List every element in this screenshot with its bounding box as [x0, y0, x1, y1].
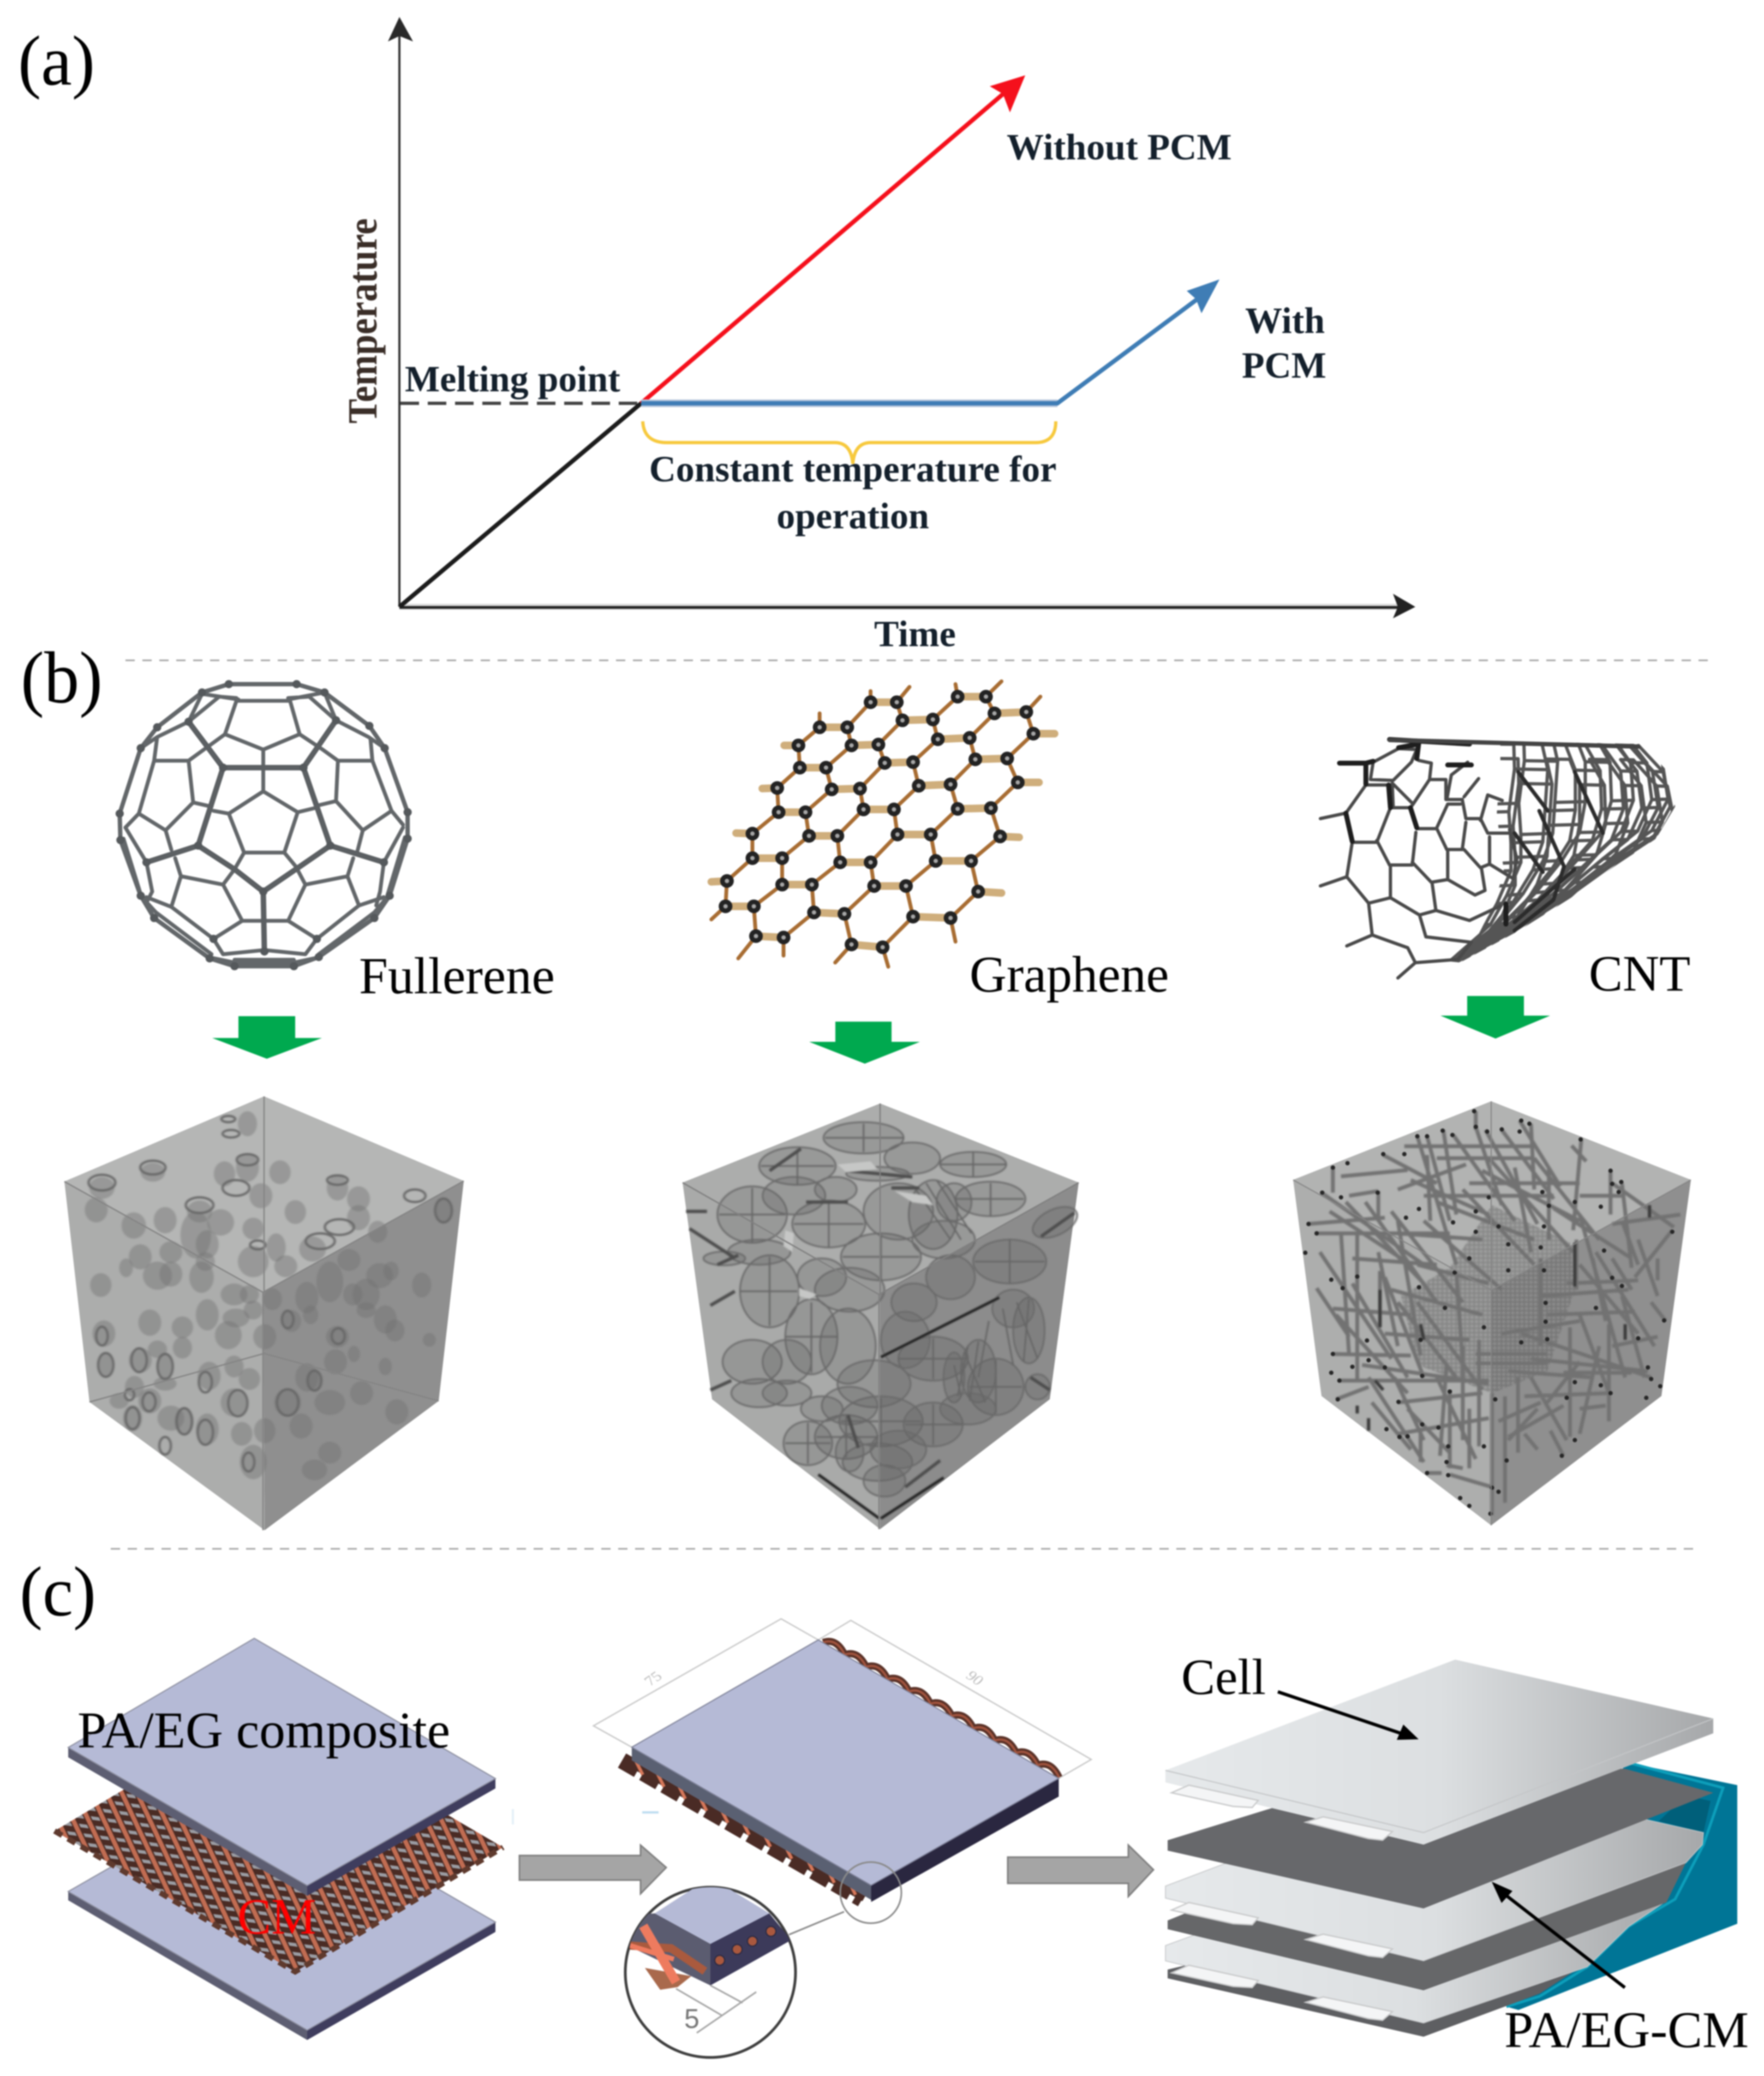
dimension values: 75 [641, 1668, 666, 1689]
dashed melting point line [400, 402, 639, 405]
x axis title: Time [874, 613, 956, 654]
red arrow without PCM [641, 75, 1025, 403]
panel label (c): (c) [20, 1553, 96, 1631]
constant temperature label: Constant temperature for [649, 448, 1056, 490]
stray blue mark [642, 1811, 659, 1813]
with PCM label: PCM [1242, 344, 1326, 386]
fullerene label: Fullerene [359, 947, 555, 1005]
plate top face [632, 1640, 1059, 1886]
constant temperature label: operation [776, 495, 929, 536]
constant temperature label [649, 448, 1056, 536]
copper mesh edge left [622, 1758, 865, 1899]
copper mesh edge right [823, 1642, 1059, 1777]
panel c: battery module assembly [20, 1553, 1749, 2059]
copper mesh layer [55, 1707, 503, 1972]
bottom dark layer [1168, 1910, 1583, 2037]
PA/EG composite label: PA/EG composite [77, 1702, 450, 1759]
white cell tabs [1171, 1785, 1392, 2020]
CNT label: CNT [1589, 946, 1690, 1002]
cell label: Cell [1181, 1649, 1266, 1705]
melting point label: Melting point [405, 358, 620, 399]
green arrow under graphene [809, 1022, 920, 1064]
middle dark layer [1168, 1801, 1686, 1990]
grey process arrow 2 [1008, 1845, 1153, 1896]
divider between panel b and c [111, 1548, 1696, 1550]
blue arrow with PCM [641, 279, 1219, 403]
green arrow under fullerene [212, 1016, 322, 1059]
magnified detail inset [622, 1877, 796, 2057]
with PCM label: With [1245, 300, 1325, 341]
stray pale mark [512, 1809, 514, 1824]
graphene label: Graphene [970, 946, 1169, 1003]
teal housing [1473, 1763, 1737, 2010]
panel a: temperature versus time chart [18, 17, 1415, 654]
x axis arrow [399, 594, 1415, 618]
panel label (b): (b) [21, 637, 103, 719]
assembled plate with mesh [594, 1619, 1091, 1935]
battery pack stack [1165, 1660, 1737, 2037]
upper dark layer [1168, 1763, 1713, 1908]
dimension 5: 5 [684, 2003, 699, 2034]
graphene sheet [711, 681, 1055, 967]
tube rim [1390, 740, 1639, 747]
panel b: carbon nanofillers [21, 637, 1691, 1530]
panel label (a): (a) [18, 22, 95, 100]
arrow to cell [1278, 1692, 1419, 1740]
dimension values: 90 [962, 1668, 987, 1689]
green arrow under CNT [1440, 996, 1550, 1039]
PA/EG-CM label: PA/EG-CM [1504, 2002, 1749, 2059]
without PCM label: Without PCM [1007, 126, 1231, 168]
arrow to composite layer [1492, 1882, 1625, 1988]
carbon nanotube [1320, 736, 1680, 978]
y axis title: Temperature [340, 218, 386, 423]
plate side faces [632, 1747, 1059, 1902]
with PCM label [1242, 300, 1326, 386]
CM label: CM [237, 1889, 316, 1945]
bottom cell [1165, 1839, 1664, 2023]
dimension lines [594, 1619, 1091, 1779]
composite cube with fullerene [64, 1096, 464, 1530]
dimension values [641, 1668, 987, 1689]
composite cube with nanotubes [1293, 1101, 1691, 1525]
top cell [1165, 1660, 1713, 1845]
lower PA/EG plate [68, 1783, 495, 2040]
small detail circle [840, 1862, 901, 1923]
upper PA/EG plate [68, 1638, 495, 1896]
yellow brace [643, 421, 1056, 464]
leader line [789, 1912, 844, 1935]
black rising line [399, 403, 641, 607]
middle cell [1165, 1776, 1703, 1961]
composite cube with graphene [683, 1103, 1083, 1529]
fullerene molecule [119, 684, 408, 966]
grey process arrow 1 [519, 1845, 666, 1894]
y axis arrow [388, 17, 413, 607]
divider between panel a and b [125, 659, 1711, 661]
